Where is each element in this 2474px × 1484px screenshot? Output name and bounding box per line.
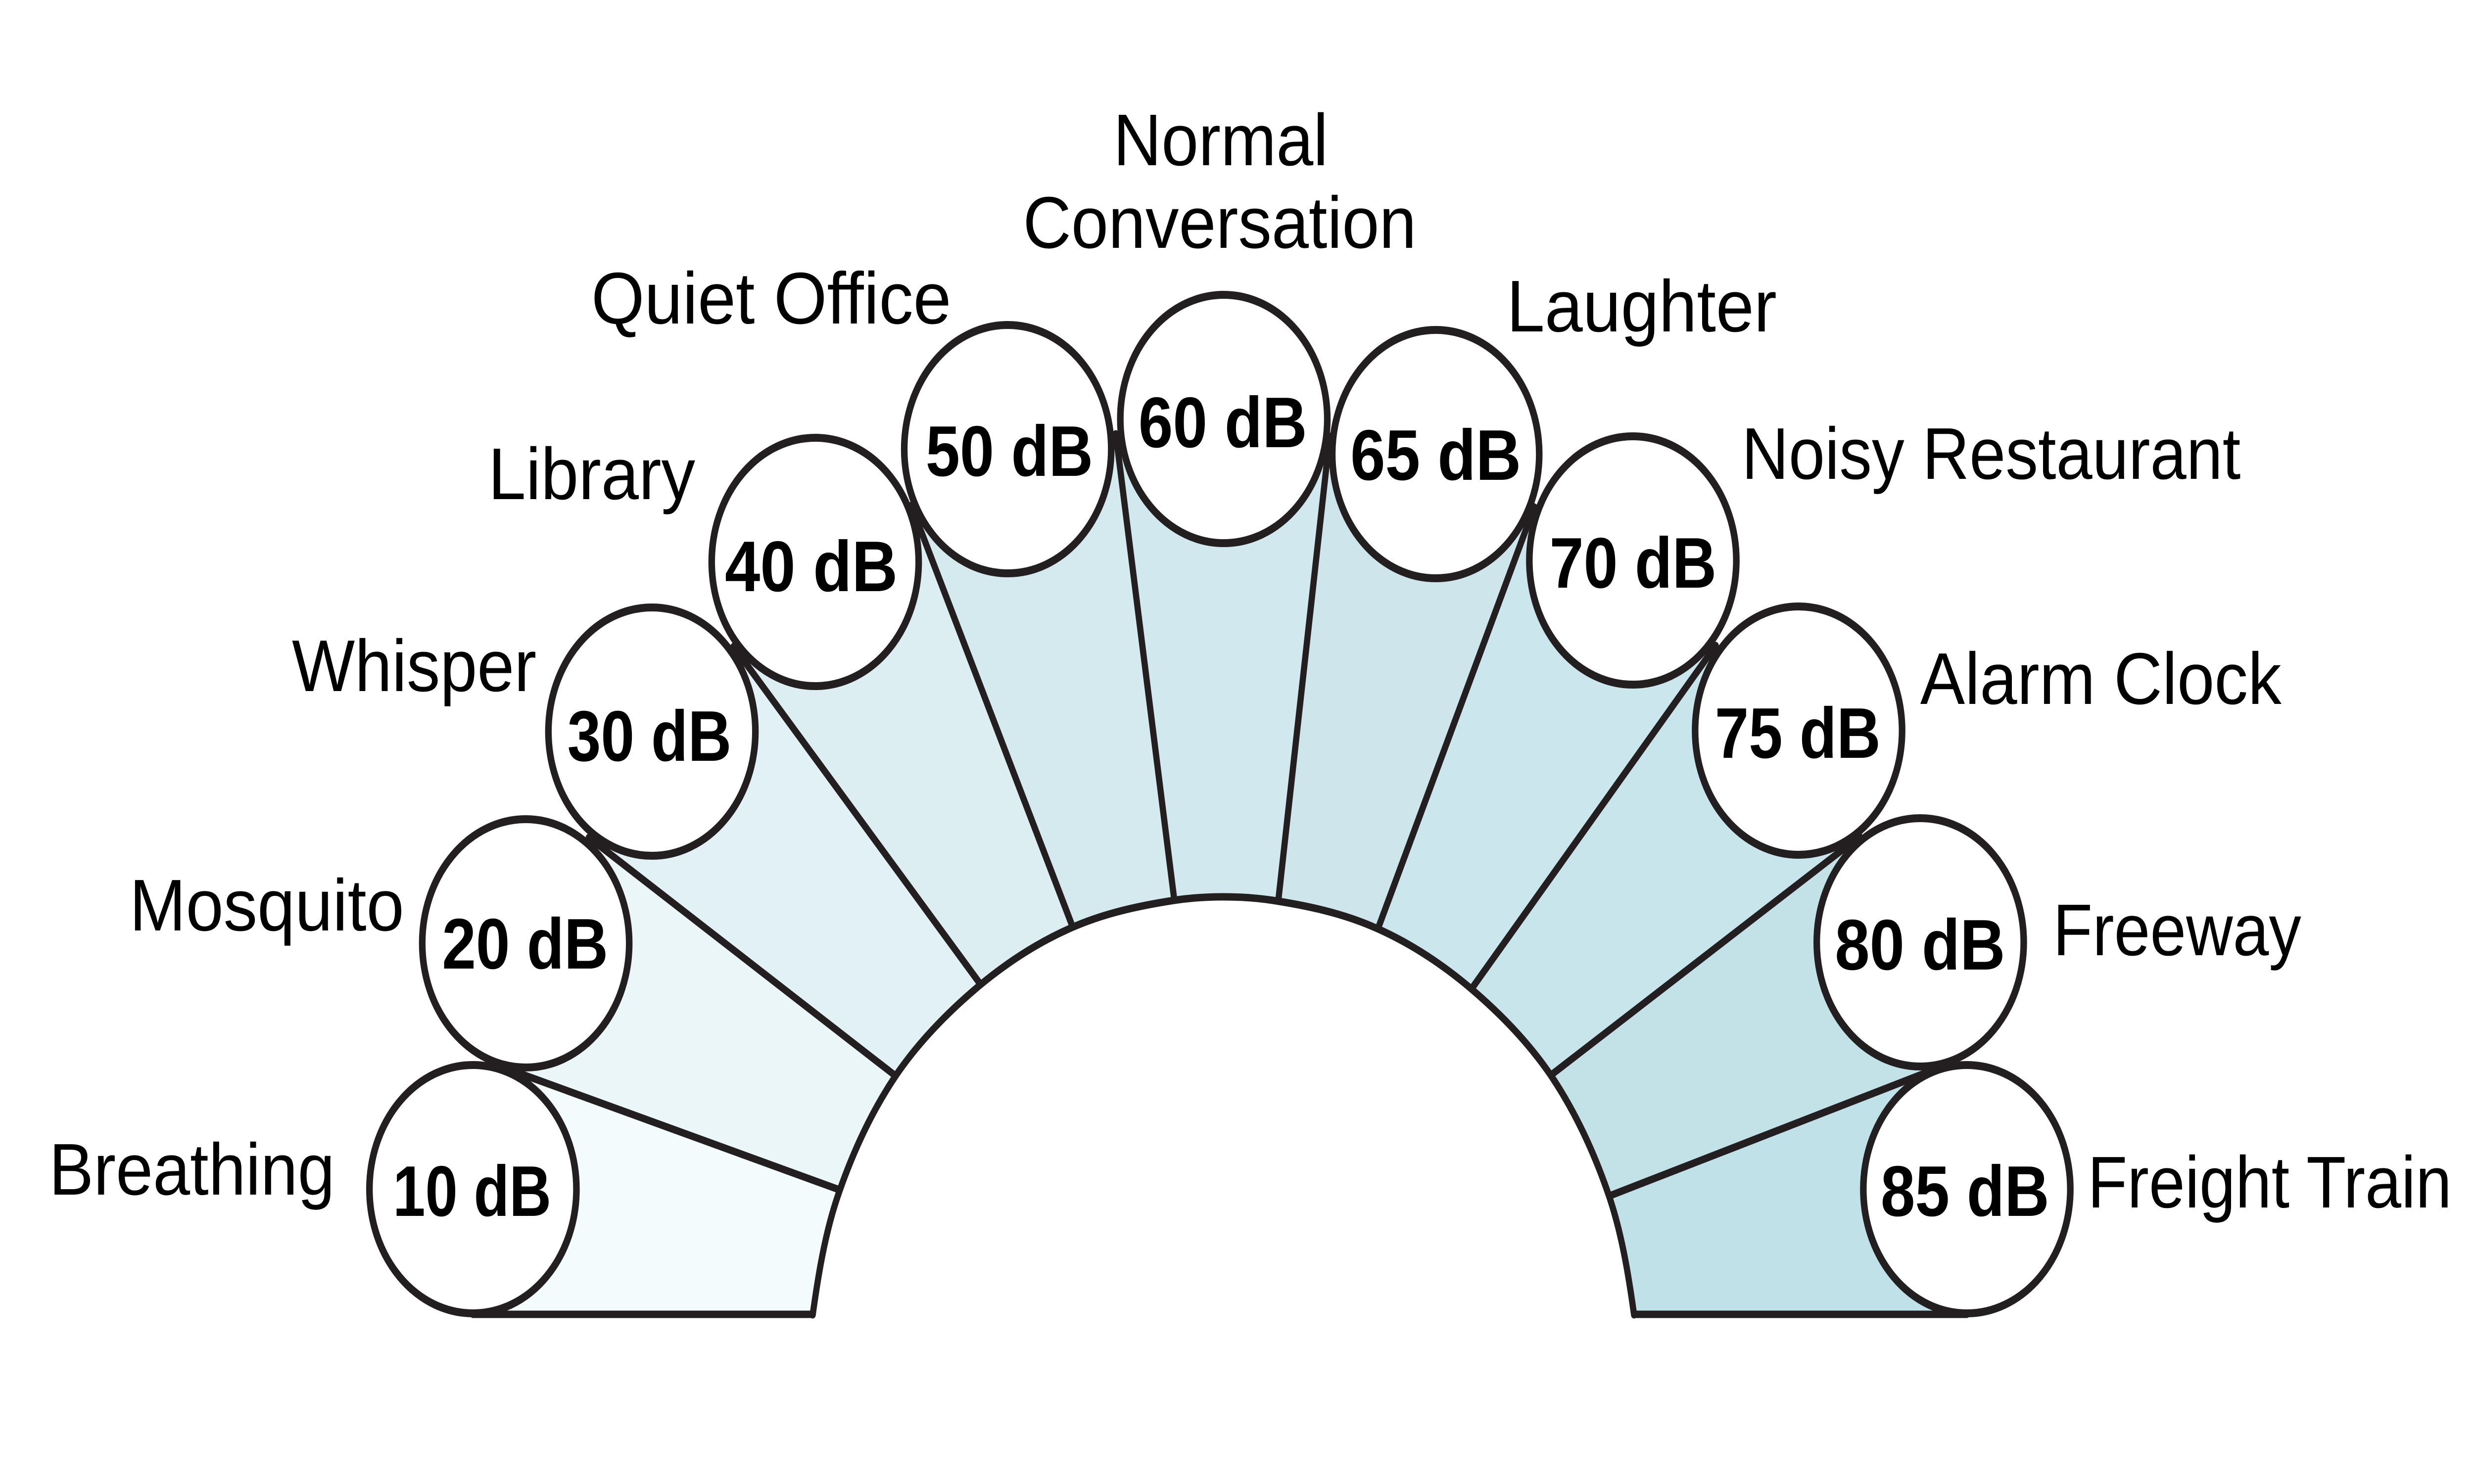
label: Mosquito: Mosquito xyxy=(130,864,404,946)
circle: 60 dB: 60 dB xyxy=(1139,383,1307,463)
inner arch outline xyxy=(812,897,1634,1315)
label: Quiet Office: Quiet Office xyxy=(591,257,952,339)
wedge: 80 dB xyxy=(1223,836,1944,1314)
circle: 70 dB: 70 dB xyxy=(1550,523,1716,603)
label: Laughter: Laughter xyxy=(1507,265,1777,347)
circle: 65 dB: 65 dB xyxy=(1350,416,1521,496)
circle: 20 dB xyxy=(422,819,629,1067)
circle: 85 dB xyxy=(1863,1065,2070,1313)
circle: 50 dB: 50 dB xyxy=(926,412,1093,492)
divider lines between wedges xyxy=(473,434,1967,1314)
circle: 70 dB xyxy=(1529,436,1736,685)
circle: 80 dB: 80 dB xyxy=(1835,905,2005,985)
label: Normal Conversation: Conversation xyxy=(1023,182,1417,264)
wedge: 10 dB xyxy=(473,1066,1224,1314)
label: Noisy Restaurant: Noisy Restaurant xyxy=(1742,413,2240,495)
circle: 40 dB: 40 dB xyxy=(725,527,898,607)
label: Normal Conversation: Normal xyxy=(1113,99,1328,181)
wedge: 65 dB xyxy=(1223,436,1534,1314)
circle: 30 dB: 30 dB xyxy=(568,696,731,777)
wedge: 30 dB xyxy=(589,647,1223,1314)
circle: 65 dB xyxy=(1332,330,1539,578)
circle: 80 dB xyxy=(1817,818,2024,1067)
label: Freight Train: Freight Train xyxy=(2088,1141,2452,1223)
wedge: 70 dB xyxy=(1223,507,1716,1314)
circle: 50 dB xyxy=(904,325,1111,573)
circle: 10 dB xyxy=(370,1065,576,1313)
circle: 30 dB xyxy=(548,607,756,856)
circle: 75 dB xyxy=(1695,606,1902,855)
label: Freeway: Freeway xyxy=(2053,889,2301,971)
circle: 20 dB: 20 dB xyxy=(442,904,608,984)
label: Normal Conversation xyxy=(1023,99,1417,264)
label: Whisper: Whisper xyxy=(292,625,536,707)
wedge: 85 dB xyxy=(1223,1066,1967,1314)
circle: 10 dB: 10 dB xyxy=(393,1152,551,1232)
circle: 40 dB xyxy=(712,438,919,686)
wedge: 50 dB xyxy=(911,434,1223,1314)
label: Breathing: Breathing xyxy=(49,1128,335,1210)
wedge: 60 dB xyxy=(1116,434,1330,1314)
wedges: coloured fan segments xyxy=(473,434,1967,1314)
inner white arch xyxy=(812,897,1634,1336)
circle: 85 dB: 85 dB xyxy=(1881,1152,2049,1232)
label: Alarm Clock: Alarm Clock xyxy=(1920,638,2282,720)
white decibel circles with values xyxy=(370,295,2070,1313)
wedge: 40 dB xyxy=(733,506,1223,1314)
circle: 75 dB: 75 dB xyxy=(1715,694,1881,774)
sound source labels xyxy=(49,99,2452,1223)
label: Library: Library xyxy=(488,433,695,515)
wedge: 75 dB xyxy=(1223,646,1859,1314)
wedge: 20 dB xyxy=(499,837,1223,1314)
circle: 60 dB xyxy=(1120,295,1327,543)
